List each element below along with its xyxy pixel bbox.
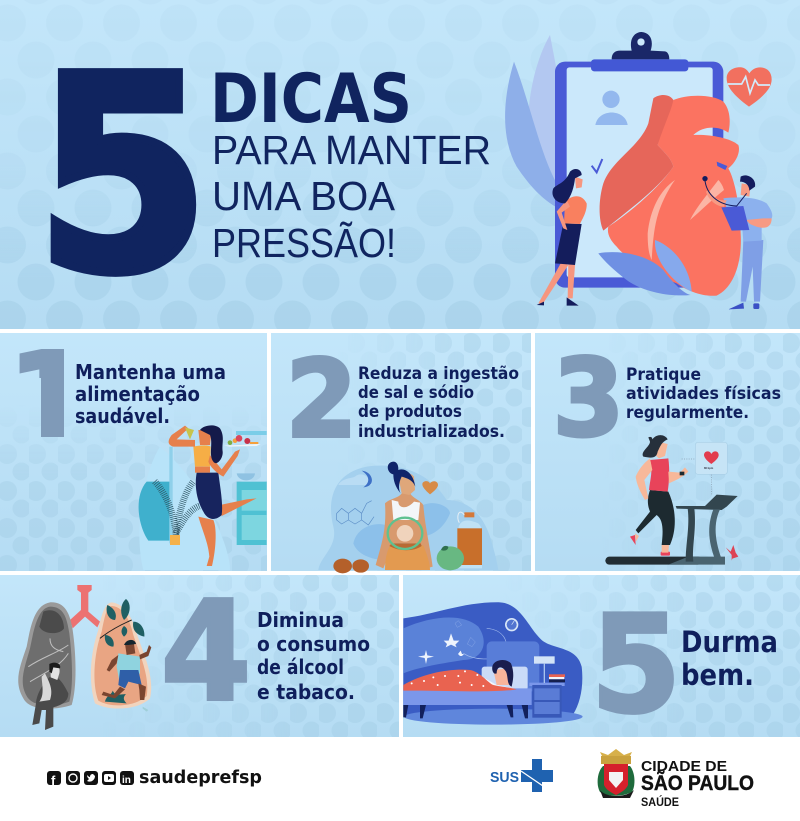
illustration: woman eating bbox=[139, 425, 267, 570]
icon: leaves behind clipboard bbox=[505, 35, 557, 207]
floor bbox=[404, 709, 583, 725]
text: dica 2: industrializados. bbox=[358, 422, 505, 442]
text: dica 1: saudável. bbox=[75, 404, 170, 428]
number 5: 5 bbox=[591, 587, 681, 743]
title: DICAS bbox=[210, 60, 412, 139]
panel: header bbox=[0, 0, 800, 333]
panel: dica 1 bbox=[0, 329, 267, 571]
title: UMA BOA bbox=[212, 173, 396, 219]
icon: check mark bbox=[592, 159, 602, 172]
text: dica 4: e tabaco. bbox=[257, 680, 355, 704]
handle: saudeprefsp bbox=[139, 767, 262, 788]
illustration: woman on treadmill bbox=[605, 435, 738, 565]
text: dica 1: alimentação bbox=[75, 382, 200, 406]
treadmill bbox=[605, 495, 738, 565]
icon: large heart bbox=[600, 95, 741, 296]
text: city name: SAÚDE bbox=[641, 794, 679, 809]
icon: clipboard bbox=[555, 32, 723, 288]
woman bbox=[376, 462, 433, 570]
heart rate card: 80 bpm bbox=[704, 466, 714, 470]
icon: heart with pulse bbox=[727, 67, 772, 107]
number 4: 4 bbox=[161, 573, 251, 732]
panel: dica 4 bbox=[0, 573, 399, 737]
title: PARA MANTER bbox=[212, 127, 491, 173]
title: PRESSÃO! bbox=[212, 220, 396, 266]
background blob bbox=[318, 466, 498, 570]
footer: social media bbox=[47, 767, 262, 788]
sleeping woman bbox=[483, 660, 513, 688]
text: dica 3: Pratique bbox=[626, 365, 701, 385]
text: dica 5: Durma bbox=[681, 625, 778, 659]
icon: front leaves bbox=[598, 240, 692, 295]
text: dica 1: Mantenha uma bbox=[75, 360, 226, 384]
text: dica 4: Diminua bbox=[257, 608, 344, 632]
panel: dica 2 bbox=[271, 333, 531, 573]
woman bbox=[169, 425, 261, 566]
icon: instagram bbox=[66, 771, 80, 785]
text: dica 2: de produtos bbox=[358, 402, 462, 422]
coat of arms bbox=[598, 749, 634, 798]
text: city name bbox=[641, 759, 754, 809]
clock bbox=[505, 618, 518, 631]
cloud and moon bbox=[338, 471, 372, 487]
text: dica 5: bem. bbox=[681, 658, 754, 692]
illustration: woman and healthy food bbox=[318, 462, 498, 573]
dumbbells bbox=[333, 559, 369, 573]
text: city name: SÃO PAULO bbox=[641, 772, 754, 795]
bed bbox=[403, 641, 539, 718]
illustration: lungs bbox=[18, 585, 151, 730]
text: dica 5 bbox=[681, 625, 778, 692]
text: dica 4: de álcool bbox=[257, 655, 344, 679]
logo: Cidade de São Paulo bbox=[598, 749, 754, 809]
number 2: 2 bbox=[286, 338, 357, 461]
text: dica 2 bbox=[358, 364, 519, 442]
text: dica 4: o consumo bbox=[257, 632, 370, 656]
text: dica 2: Reduza a ingestão bbox=[358, 364, 519, 384]
icon: linkedin: in bbox=[122, 775, 131, 786]
boy running bbox=[102, 640, 151, 700]
text: dica 1 bbox=[75, 360, 226, 428]
text: dica 3: atividades físicas bbox=[626, 384, 781, 404]
diseased lung bbox=[18, 602, 76, 709]
lamp bbox=[534, 656, 555, 683]
runner bbox=[630, 435, 688, 556]
icon: patient silhouette bbox=[595, 91, 628, 125]
number 1: 1 bbox=[9, 329, 90, 464]
trachea bbox=[70, 585, 100, 628]
heart bbox=[422, 481, 438, 494]
man smoking bbox=[32, 663, 68, 730]
icon: linkedin bbox=[120, 771, 134, 786]
books bbox=[549, 674, 565, 682]
healthy lung bbox=[91, 599, 151, 709]
illustration: woman sleeping bbox=[403, 602, 583, 725]
bottle bbox=[457, 512, 482, 568]
dream cloud with stars bbox=[403, 617, 506, 673]
big number 5: 5 bbox=[35, 18, 210, 333]
kitchen bbox=[139, 431, 267, 570]
night blob bbox=[403, 602, 582, 717]
logo: SUS bbox=[490, 759, 553, 792]
illustration: clipboard and heart bbox=[505, 32, 772, 309]
text: dica 3: regularmente. bbox=[626, 403, 749, 423]
icon: woman bbox=[537, 169, 587, 306]
text: city name: CIDADE DE bbox=[641, 759, 727, 775]
number 3: 3 bbox=[553, 337, 624, 460]
plant bbox=[726, 545, 738, 561]
icon: doctor bbox=[702, 175, 772, 309]
panel: dica 5 bbox=[403, 575, 800, 743]
cigarette bbox=[143, 707, 148, 712]
text: dica 4 bbox=[257, 608, 370, 704]
icon: youtube bbox=[102, 771, 116, 785]
nightstand bbox=[529, 683, 565, 718]
monstera leaves bbox=[353, 503, 450, 560]
icon: facebook bbox=[47, 771, 61, 788]
icon: facebook: f bbox=[51, 773, 56, 788]
text: dica 2: de sal e sódio bbox=[358, 383, 474, 403]
logo: SUS: SUS bbox=[490, 769, 519, 786]
plant bbox=[154, 481, 199, 545]
panel: dica 3 bbox=[535, 333, 800, 571]
icon: twitter bbox=[84, 771, 98, 785]
text: dica 3 bbox=[626, 365, 781, 423]
blanket bbox=[403, 670, 517, 691]
apple bbox=[437, 546, 464, 570]
title bbox=[210, 60, 491, 266]
molecule bbox=[337, 501, 374, 525]
